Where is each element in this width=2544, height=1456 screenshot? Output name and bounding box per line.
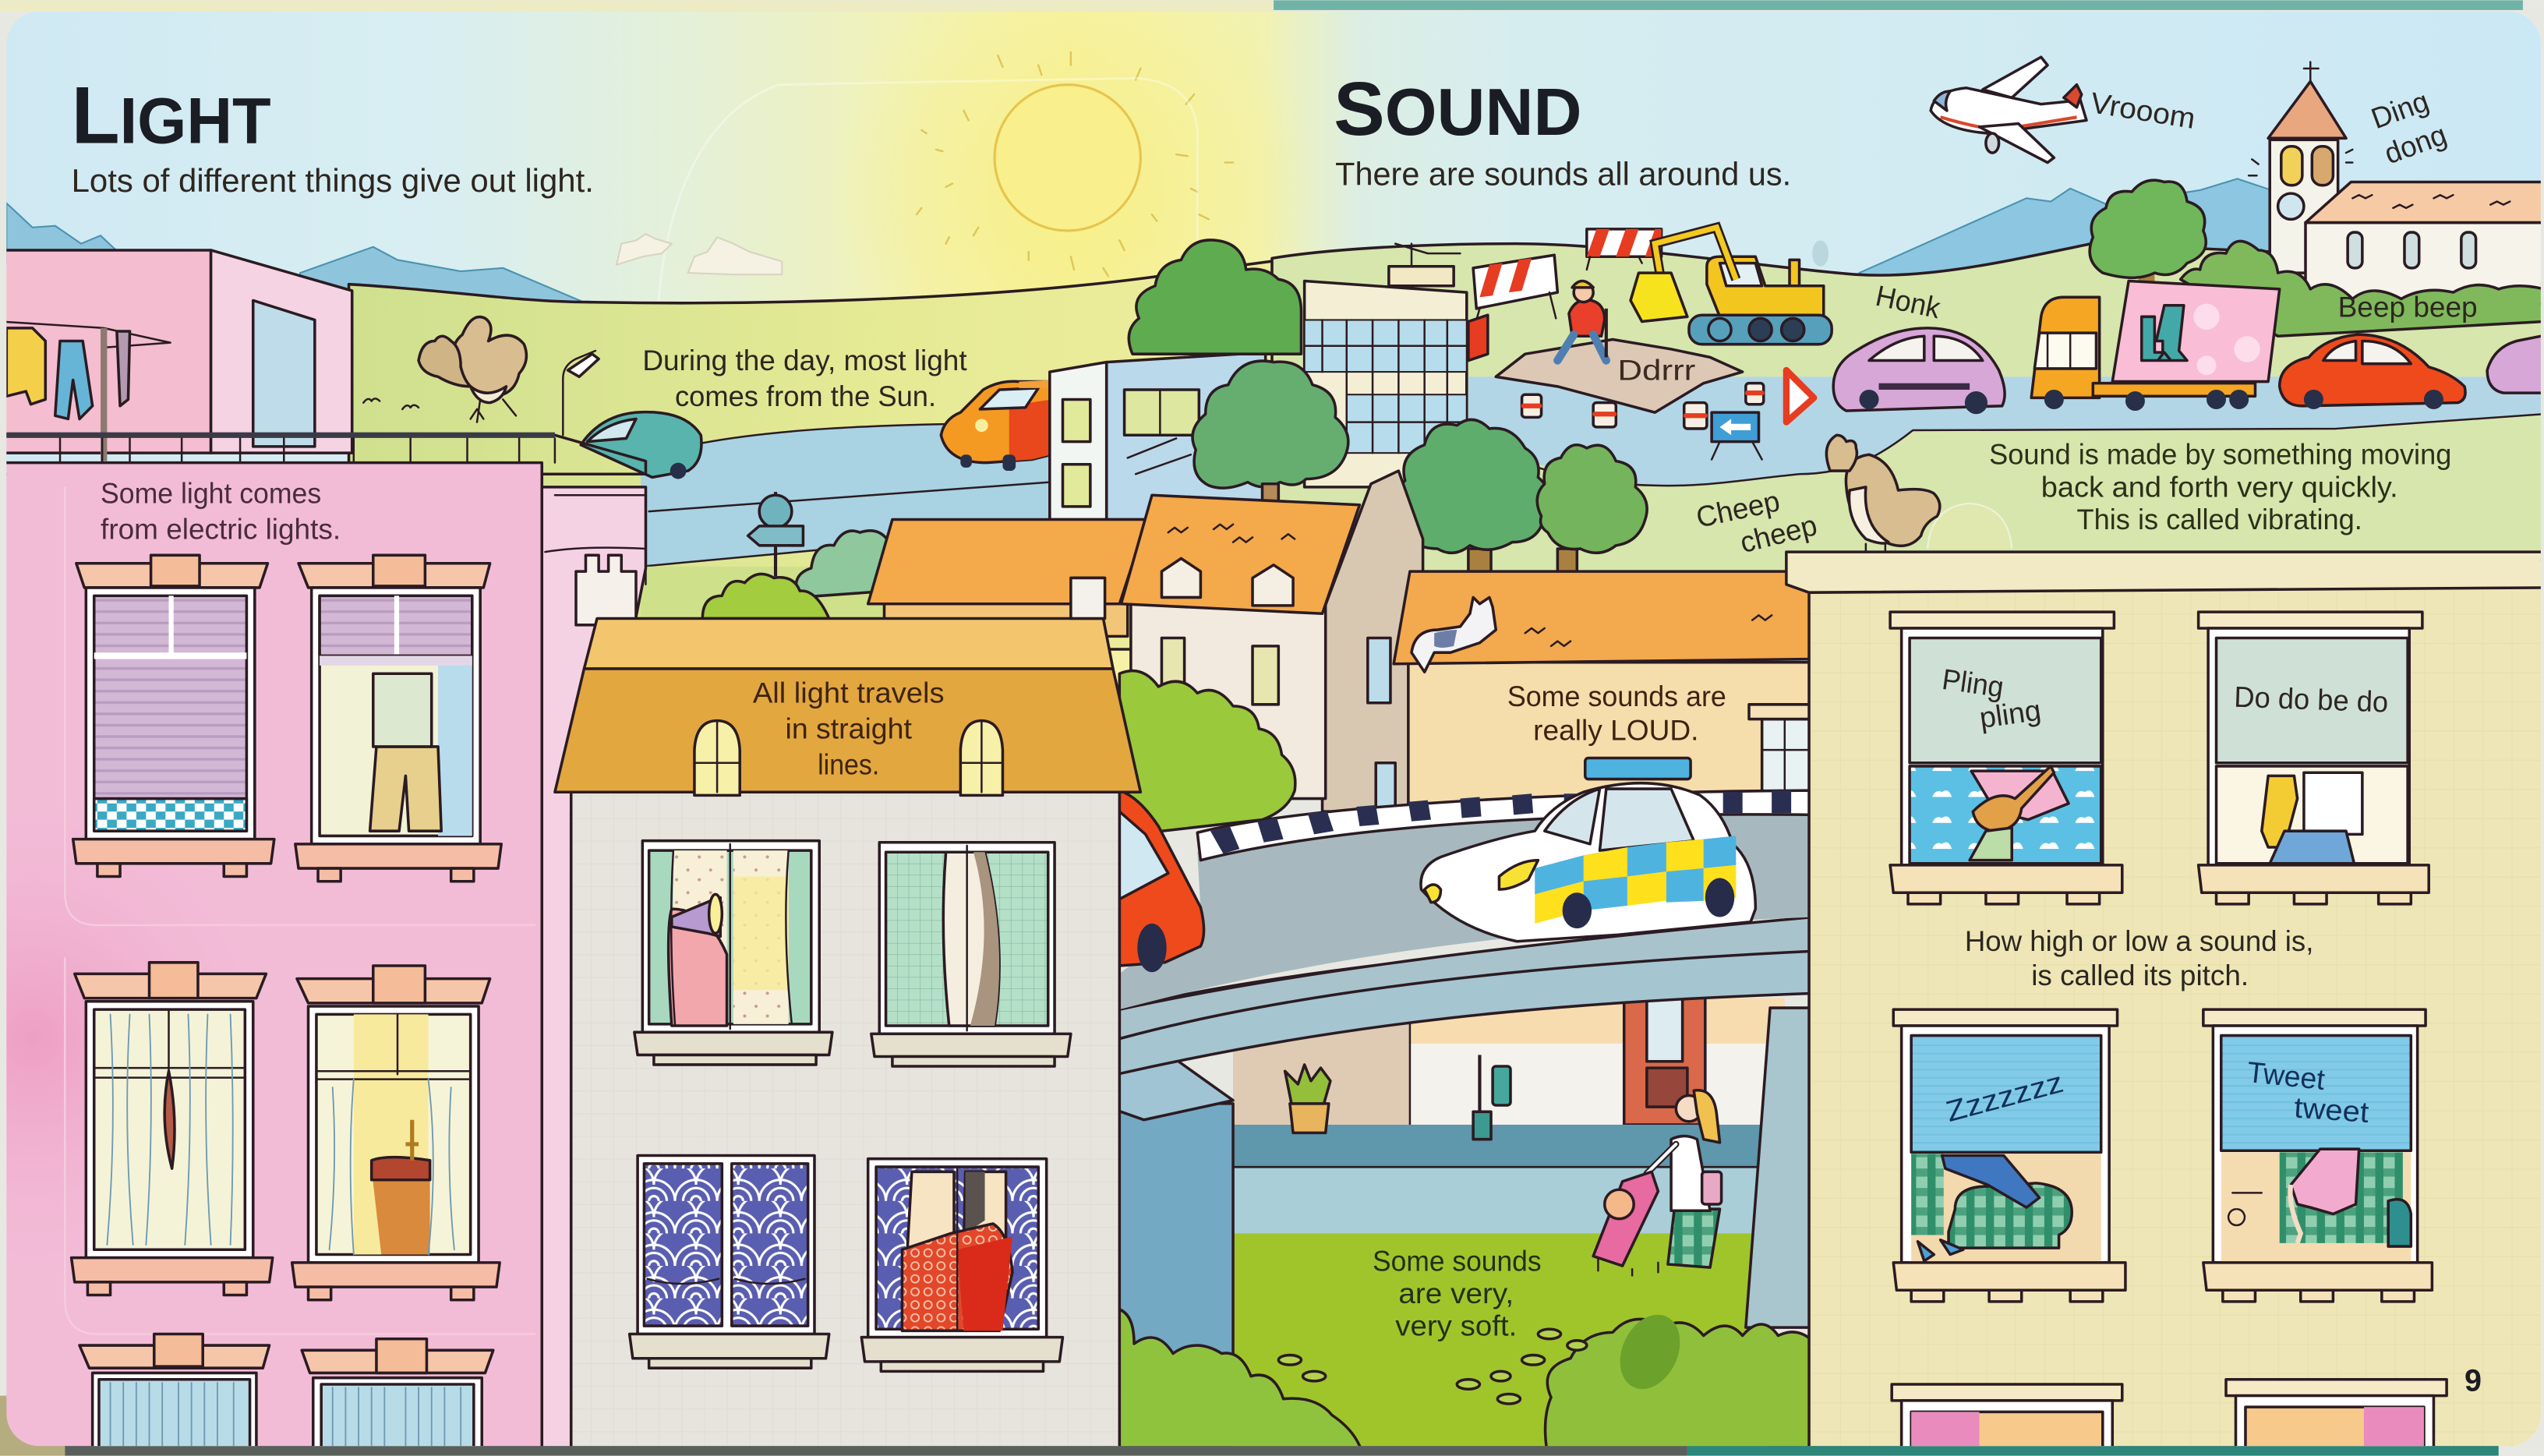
text: pitch: is called its pitch. <box>2031 959 2249 991</box>
airplane <box>1931 57 2086 163</box>
window: man behind blind <box>295 555 501 882</box>
right roof and wall <box>1394 571 1814 808</box>
potted plant <box>1285 1065 1330 1133</box>
sun <box>917 52 1233 276</box>
chimney white <box>576 555 636 625</box>
text: soft sounds: Some sounds <box>1373 1244 1542 1277</box>
window: lamp glow <box>292 966 500 1300</box>
road cones <box>1522 383 1764 429</box>
warning triangle <box>1786 370 1814 422</box>
sound word: Ddrrr: Ddrrr <box>1617 353 1695 386</box>
orange lorry <box>2031 281 2280 411</box>
text: pitch: How high or low a sound is, <box>1965 924 2313 957</box>
text: light travels straight: All light travels <box>753 677 945 709</box>
tree by church <box>2090 180 2206 283</box>
text: vibrating: This is called vibrating. <box>2076 503 2362 535</box>
church <box>2249 62 2544 304</box>
orange roof left <box>868 520 1147 636</box>
text: vibrating: Sound is made by something moving <box>1989 438 2451 471</box>
window: woman on armchair <box>2203 1009 2432 1302</box>
window: blue wave curtains <box>630 1156 829 1368</box>
dormer right <box>960 721 1002 795</box>
dormer left <box>694 721 740 795</box>
purple car partial <box>2487 334 2544 393</box>
title: Light: LIGHT <box>72 71 271 161</box>
sound word: Beep beep: Beep beep <box>2338 290 2478 323</box>
sound word: Cheep: Cheep <box>1693 484 1783 534</box>
clouds <box>617 234 782 274</box>
window: saxophone player <box>2199 612 2429 904</box>
window: red armchair <box>861 1159 1062 1371</box>
red car <box>2280 334 2465 409</box>
cream building <box>1786 504 2544 1456</box>
sound word: Zzzzzzz: Zzzzzzz <box>1942 1065 2067 1128</box>
title: Sound: SOUND <box>1334 65 1582 151</box>
window: bottom left pink <box>1892 1384 2122 1456</box>
text: daylight from the Sun: During the day, most light <box>642 344 967 376</box>
text: light travels straight: lines. <box>818 747 879 780</box>
bush beside house <box>1119 671 1295 836</box>
street post and bin <box>1473 1055 1510 1140</box>
police car <box>1421 758 1755 942</box>
construction barriers <box>1468 229 1662 361</box>
text: daylight from the Sun: comes from the Sun. <box>675 380 936 412</box>
lamp head <box>568 354 599 376</box>
mother with pushchair <box>1593 1090 1722 1276</box>
mountains left <box>6 203 588 304</box>
text: electric lights: from electric lights. <box>101 512 341 545</box>
roof door <box>253 300 315 447</box>
text: light travels straight: in straight <box>786 712 912 745</box>
house with orange roof <box>1121 471 1423 811</box>
shrub bright <box>702 574 829 618</box>
sky <box>0 0 2544 682</box>
left pillar <box>1116 1104 1233 1355</box>
worker <box>1557 281 1606 361</box>
side wall <box>542 487 645 1456</box>
back pink building <box>0 250 352 461</box>
railing <box>5 435 645 474</box>
under flyover scene <box>1233 993 1785 1456</box>
window: guitar player <box>1890 612 2122 904</box>
sound word: tweet: tweet <box>2293 1090 2370 1129</box>
sound word: cheep: cheep <box>1737 508 1820 559</box>
sound word: Tweet: Tweet <box>2245 1055 2327 1096</box>
tree behind <box>1129 240 1301 354</box>
bush lower right <box>1546 1319 1814 1456</box>
right road and pond <box>1468 376 2544 486</box>
sound word: pling: pling <box>1977 694 2043 734</box>
barrier <box>1197 790 1814 861</box>
window: sleeping on sofa <box>1893 1009 2125 1302</box>
trees centre <box>1395 419 1647 578</box>
bird left <box>363 317 526 422</box>
sound word: dong: dong <box>2380 118 2450 170</box>
bush lower left <box>1111 1308 1365 1456</box>
washing line with clothes <box>0 322 171 461</box>
orange car <box>941 380 1051 471</box>
window: bottom right orange <box>2226 1380 2447 1456</box>
window: blue curtains right <box>302 1339 493 1456</box>
arrow sign <box>1712 412 1762 459</box>
bird right <box>1826 435 1940 557</box>
page number: 9 <box>2464 1363 2482 1398</box>
bracket <box>1116 1060 1233 1120</box>
hill left <box>349 260 1281 649</box>
window: blue curtains left <box>80 1334 270 1456</box>
hill right <box>1272 244 2544 585</box>
deck lower band <box>1116 928 1814 1074</box>
digger <box>1631 228 1832 345</box>
left road <box>641 422 1049 617</box>
text: electric lights: Some light comes <box>101 477 321 510</box>
white and blue building <box>1050 352 1266 520</box>
sun glow <box>869 17 1266 296</box>
text: loud sounds: Some sounds are <box>1507 680 1726 712</box>
bush shadow <box>1609 1305 1691 1399</box>
mansard roof <box>555 578 1140 792</box>
road surface <box>1119 810 1814 1009</box>
street lamp <box>563 351 595 435</box>
dirt patch <box>1496 339 1743 412</box>
cat <box>1412 597 1496 672</box>
window: white curtains <box>72 963 273 1295</box>
flap outline in sky <box>657 78 1197 325</box>
intro text: sound: There are sounds all around us. <box>1335 156 1791 193</box>
window: lamp and curtains <box>634 841 832 1065</box>
sound word: Honk: Honk <box>1873 279 1943 324</box>
teal car <box>581 412 701 479</box>
right pillar <box>1746 1008 1814 1327</box>
text: soft sounds: very soft. <box>1395 1309 1517 1342</box>
purple car <box>1833 328 2005 414</box>
deck kerb <box>1119 917 1814 1039</box>
window: green grid curtains <box>871 843 1071 1066</box>
window: blind with checks <box>73 555 274 876</box>
fallen leaves <box>1278 1329 1587 1404</box>
text: loud sounds: really LOUD. <box>1533 714 1698 747</box>
text: soft sounds: are very, <box>1398 1277 1514 1309</box>
signpost <box>748 492 803 576</box>
pink building <box>0 463 645 1456</box>
upper tree <box>1192 361 1348 520</box>
grey building <box>571 792 1119 1456</box>
flyover <box>1116 790 1814 1355</box>
shrub dark <box>796 531 889 597</box>
church hedge <box>2181 241 2544 336</box>
office building <box>1305 244 1467 487</box>
intro text: light: Lots of different things give out light. <box>72 162 594 199</box>
red van <box>1119 790 1204 972</box>
sound word: Pling: Pling <box>1940 663 2005 704</box>
sound word: Do do be do: Do do be do <box>2234 680 2389 719</box>
text: vibrating: back and forth very quickly. <box>2041 470 2398 503</box>
mountains right <box>1858 178 2268 274</box>
sound word: Vrooom: Vrooom <box>2088 86 2198 135</box>
sound word: Ding: Ding <box>2367 84 2433 135</box>
